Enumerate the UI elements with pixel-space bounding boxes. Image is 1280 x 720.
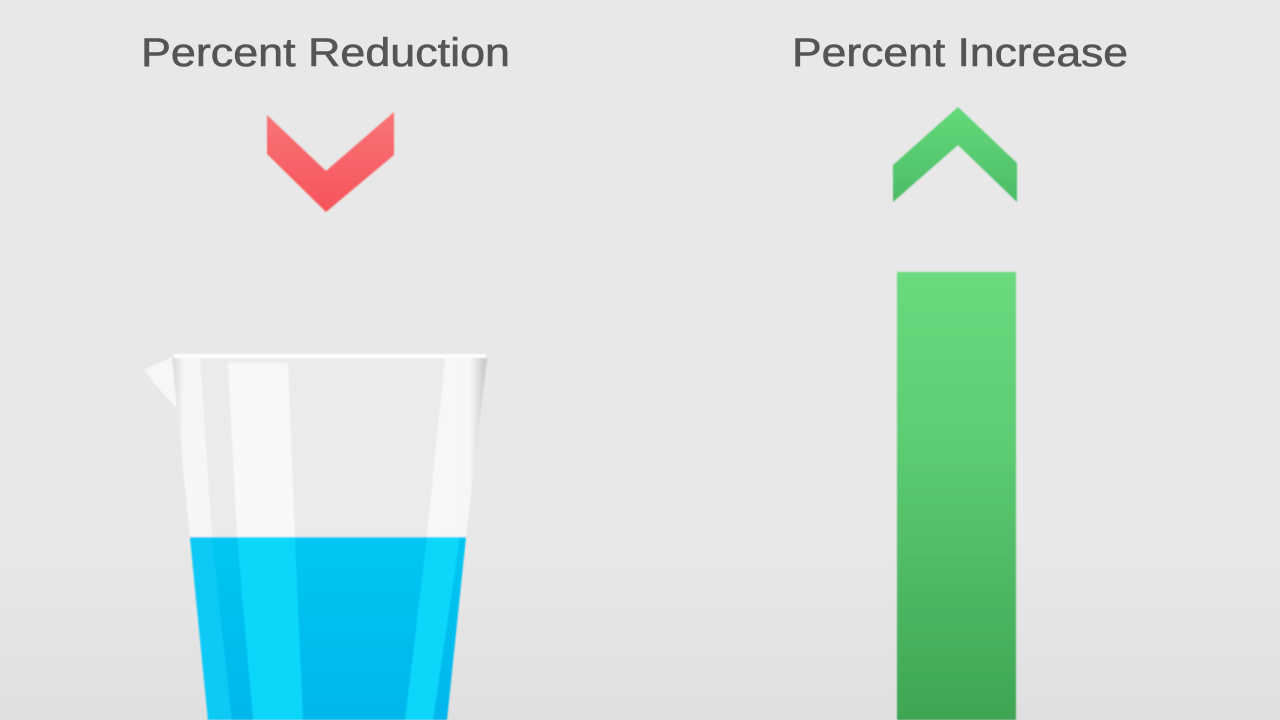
water left band	[190, 537, 232, 720]
heading: percent reduction: Percent Reduction	[141, 31, 510, 75]
beaker left wall highlight	[172, 358, 212, 537]
water right highlight	[405, 537, 460, 720]
icon: green up chevron	[893, 107, 1017, 202]
green increase bar	[897, 272, 1016, 720]
water inner highlight	[237, 537, 303, 720]
beaker right wall highlight	[427, 358, 487, 537]
beaker inner glass highlight	[228, 363, 295, 537]
heading: percent increase: Percent Increase	[792, 31, 1128, 75]
beaker of blue water	[144, 354, 487, 720]
beaker rim	[174, 354, 486, 358]
icon: red down chevron	[267, 112, 394, 212]
water	[190, 537, 466, 720]
beaker glass body	[172, 358, 487, 537]
beaker spout	[144, 357, 177, 408]
